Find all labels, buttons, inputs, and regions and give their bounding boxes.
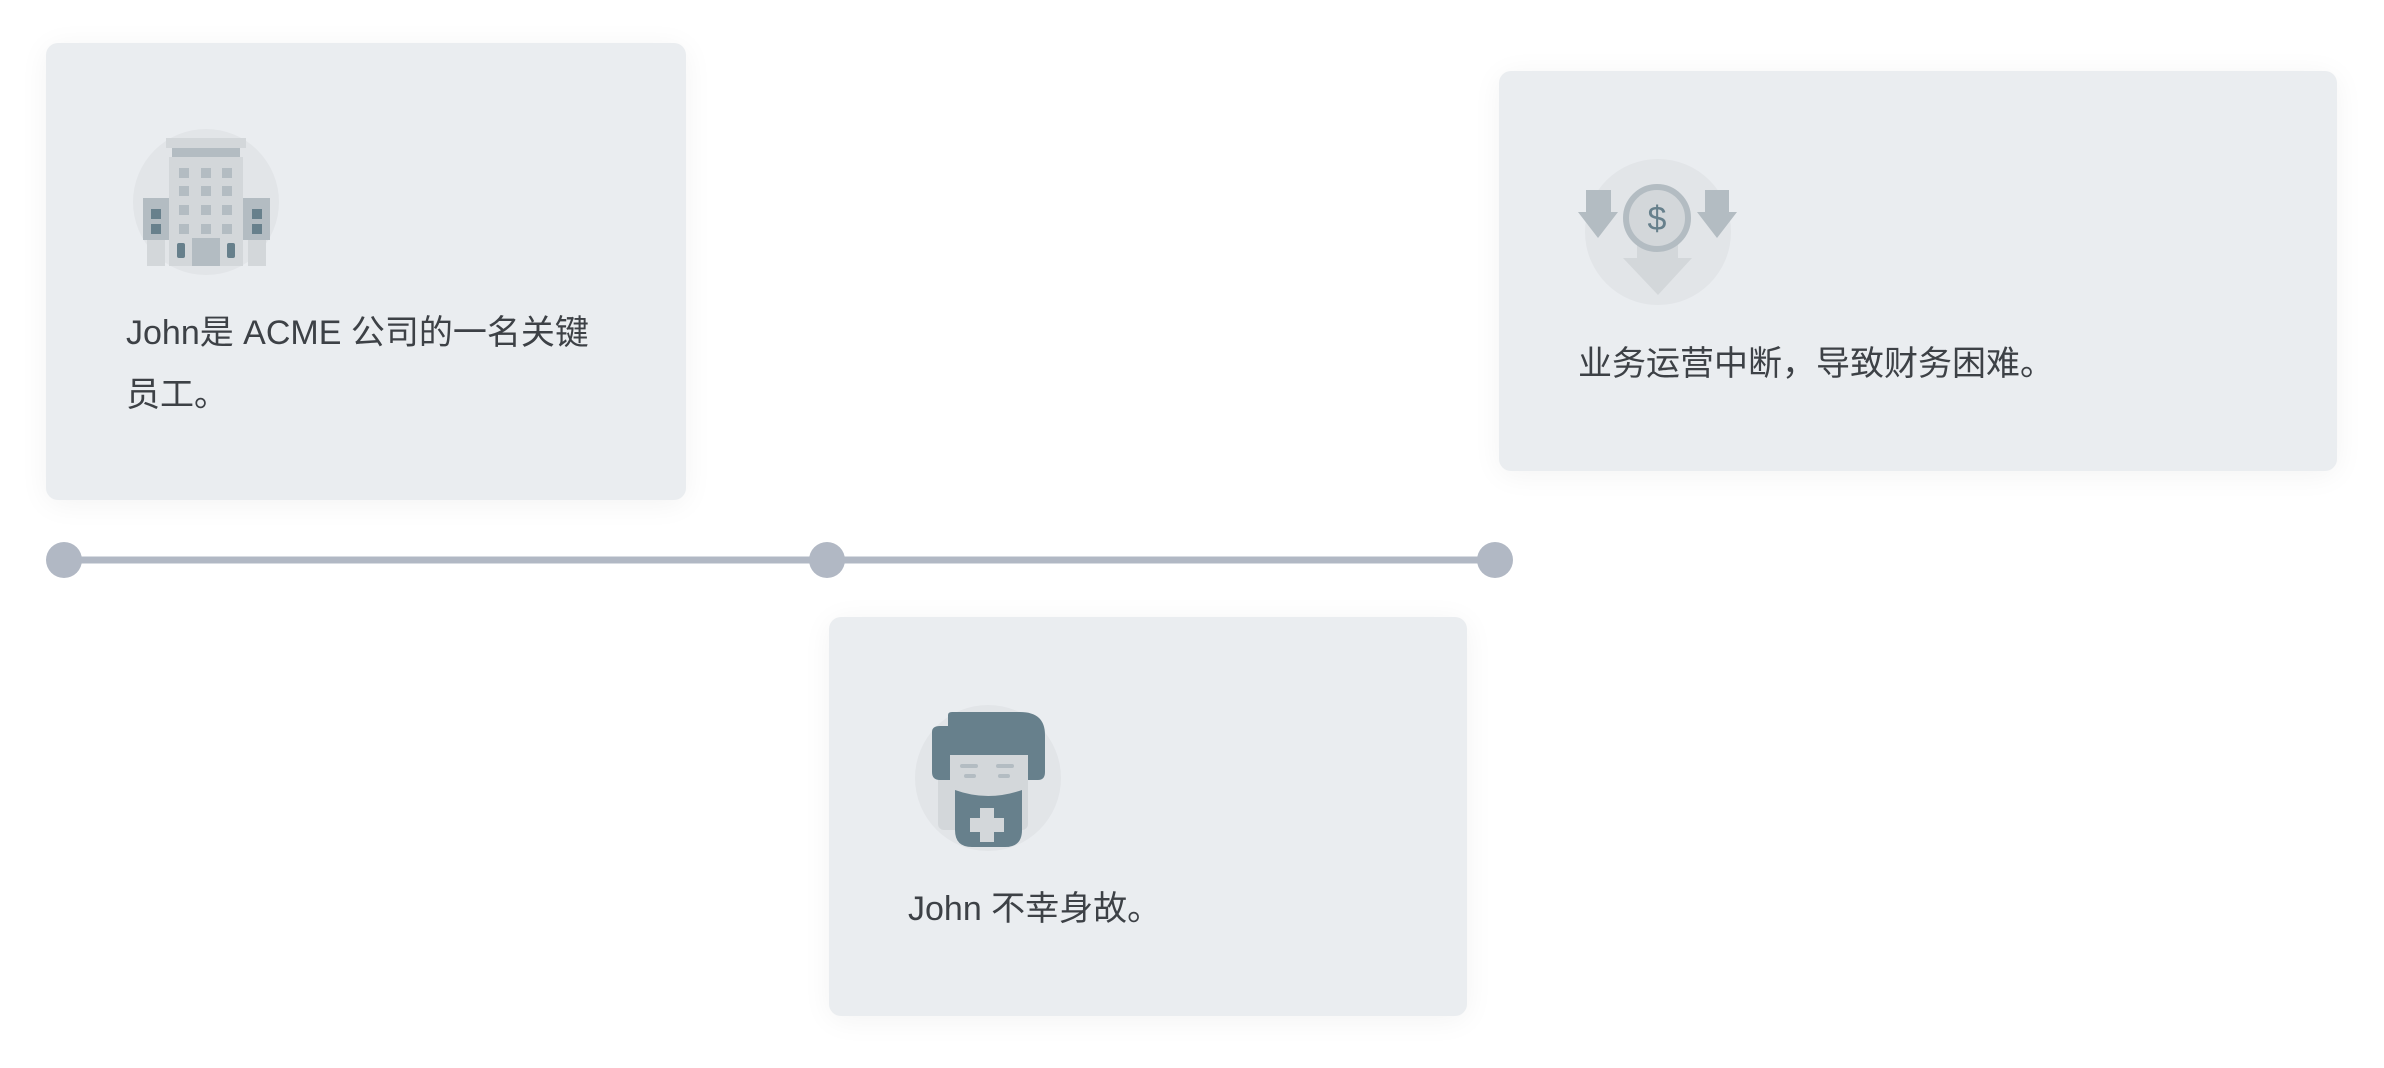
icon: money down [1578, 184, 1737, 295]
icon: building [143, 138, 270, 266]
icon: money down: $ [1648, 200, 1667, 238]
icon: masked person [932, 712, 1045, 847]
card: John died [829, 617, 1467, 1016]
text: John died: John 不幸身故。 [908, 890, 1161, 928]
text: employee: John是 ACME 公司的一名关键员工。 [126, 314, 589, 414]
card: business disruption [1499, 71, 2337, 471]
card: employee [46, 43, 686, 500]
text: business disruption: 业务运营中断，导致财务困难。 [1578, 345, 2054, 383]
